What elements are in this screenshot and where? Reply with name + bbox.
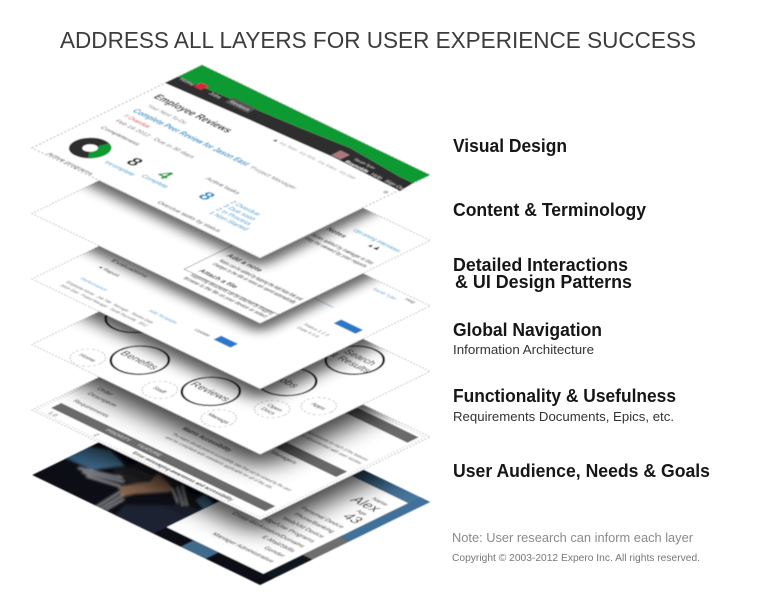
next to-do: Your Next To-Do — [145, 104, 189, 125]
next to-do — [111, 103, 311, 199]
site map labels: Apps — [309, 402, 327, 411]
shadow from layer 2 — [80, 246, 381, 338]
panel outline — [32, 327, 430, 520]
form details: ● Report — [96, 266, 121, 278]
notes copy: Supporting documents can be attached by dragging — [188, 273, 276, 316]
persona card — [167, 456, 408, 574]
site map labels: Manage — [205, 412, 232, 425]
notes copy: browse to the file on your device or select — [181, 276, 269, 319]
labels — [453, 136, 710, 481]
persona photo — [32, 442, 412, 585]
completeness donut — [45, 126, 149, 176]
page heading: Employee Reviews — [150, 93, 235, 134]
persona text — [199, 470, 394, 565]
site map labels: & Results — [325, 351, 374, 374]
label: user audience: User Audience, Needs & Goals — [453, 461, 710, 481]
requirements text: Requirements for each of the features — [302, 429, 370, 462]
form details — [58, 207, 417, 381]
form details: Sarah Tyler — [370, 287, 399, 301]
navigation site map — [38, 266, 417, 450]
label: global navigation — [453, 320, 602, 357]
dark navigation band — [165, 77, 413, 191]
persona text: Cross-Workstation/Domains — [229, 511, 307, 549]
layer 2: content and terminology — [31, 180, 430, 324]
site map labels: Staff — [150, 386, 168, 395]
filter row — [270, 137, 391, 195]
filter row: Any Team · Any Role · Any Status · Any Date — [277, 141, 358, 180]
notes copy: may be viewed by your reports — [302, 236, 369, 269]
active tasks: Active tasks — [203, 177, 242, 195]
next to-do: !! Overdue — [121, 114, 152, 129]
panel outline — [32, 196, 430, 389]
navigation items: Sign Out — [382, 179, 407, 191]
active tasks: Overdue tasks by status — [155, 200, 223, 233]
requirements text: PRIORITY — [103, 429, 132, 443]
label: functionality and usefulness — [453, 386, 676, 424]
site map labels: Jobs — [271, 375, 302, 389]
requirements text: 2 — [91, 433, 101, 438]
requirements text: 1.0 — [46, 411, 60, 418]
active tasks: 2 In Process — [214, 207, 254, 227]
next to-do: Complete Peer Review for Jason East — [130, 108, 253, 167]
shadow from layer 4 — [62, 376, 400, 481]
form details: Employee Name · Job Title · Manager · Review Date — [64, 281, 155, 325]
label: content and terminology: Content & Terminology — [453, 200, 646, 220]
navigation items: Reviews — [227, 100, 251, 112]
site map labels: Open — [265, 403, 284, 413]
form details: Evaluations — [109, 259, 150, 278]
navigation items: Home — [177, 78, 196, 87]
active tasks — [155, 177, 284, 239]
title: ADDRESS ALL LAYERS FOR USER EXPERIENCE SUCCESS — [60, 27, 696, 53]
label: global navigation: Information Architecture — [453, 343, 594, 357]
requirements text: The matrix should present accessibility data that can be viewed by the user — [169, 433, 293, 492]
requirements text: are documented with user stories — [296, 433, 363, 465]
persona text: Knowledge/Use Programs — [244, 509, 317, 544]
notes copy: Attach a file — [196, 268, 241, 289]
site map labels: Benefits — [117, 350, 162, 371]
next to-do: Feb 16 2012 · Due in 30 days — [113, 119, 197, 159]
blue photo border strips — [154, 451, 430, 585]
form details: Status 1 2 3 — [301, 323, 331, 337]
active tasks: 3 Due soon — [221, 204, 258, 222]
persona text: Gender — [261, 546, 288, 559]
notes copy: Notes — [324, 226, 350, 239]
notes copy — [180, 210, 403, 319]
navigation items: Sarah Tyler — [352, 158, 378, 170]
layer 1: visual design screen — [32, 65, 430, 260]
persona text: Age — [354, 510, 368, 516]
notes copy: changes to the title or notes are saved automatically — [210, 262, 299, 305]
form details: Date 4 5 6 — [295, 326, 321, 339]
filter row: ⚙ — [380, 190, 391, 195]
program stats — [102, 149, 188, 191]
panel outline — [32, 262, 430, 454]
label: detailed interactions — [453, 255, 632, 292]
form details: Update — [192, 328, 212, 338]
persona text: Phone/Banking — [291, 512, 337, 534]
requirements text: Managers — [268, 450, 299, 465]
requirements text: Matrix Accessibility — [180, 426, 235, 453]
label: visual design: Visual Design — [453, 136, 567, 156]
panel outline — [32, 130, 430, 323]
layer 5: functionality and usefulness — [31, 376, 430, 520]
active tasks: 8 — [193, 189, 220, 203]
persona text: Personal Device — [298, 506, 346, 529]
requirements text — [46, 358, 370, 515]
site map labels: Reviews — [187, 381, 233, 403]
persona text: Name — [369, 497, 391, 507]
navigation items — [174, 76, 415, 191]
form details: Help — [402, 298, 417, 305]
shadow from layer 1 — [80, 180, 381, 272]
form details: Performance — [78, 277, 109, 292]
persona text: 43 — [338, 512, 366, 526]
label: global navigation: Global Navigation — [453, 320, 602, 340]
site map labels: Docs — [259, 407, 277, 416]
notes copy: Notes added by manager to this — [309, 233, 376, 265]
completeness donut: Completeness — [98, 126, 142, 147]
completeness donut: Active programs — [45, 152, 95, 176]
site map labels: Home — [77, 353, 98, 363]
requirements text: FEATURE — [135, 444, 163, 458]
green header band — [178, 65, 430, 183]
buttons — [214, 294, 372, 371]
requirement bars — [51, 334, 419, 512]
label: detailed interactions: & UI Design Patterns — [455, 272, 632, 292]
label: functionality and usefulness: Requirements Documents, Epics, etc. — [453, 410, 674, 424]
site map labels — [77, 286, 400, 443]
copyright: Copyright © 2003-2012 Expero Inc. All rights reserved. — [452, 552, 700, 564]
persona text: Web/Vid Device — [280, 516, 327, 539]
notes copy: Upcoming interviews — [350, 228, 403, 253]
shadow from layer 5 — [54, 442, 396, 546]
label: detailed interactions: Detailed Interactions — [453, 255, 628, 275]
active tasks: 2 Overdue — [228, 200, 262, 217]
program stats: 8 — [121, 155, 148, 168]
requirements text: Order — [95, 387, 115, 397]
requirements text: and be compliant with standards applicable for all of the site. — [163, 436, 275, 490]
notes box border — [184, 205, 410, 315]
requirements text: Error messaging-awareness and accessibility — [130, 451, 236, 502]
persona text: Alex — [346, 495, 385, 514]
active tasks: 1 Non-Started — [207, 211, 250, 232]
filter row: ▲ — [270, 138, 282, 143]
program stats: Complete — [139, 174, 170, 189]
label: functionality and usefulness: Functionality & Usefulness — [453, 386, 676, 406]
layer 6: user audience persona — [32, 442, 430, 586]
next to-do: Project Manager — [248, 166, 299, 190]
site map labels: Search — [340, 349, 379, 367]
layer 4: global navigation — [31, 311, 430, 455]
inner outline — [37, 329, 425, 518]
requirements text: Description — [85, 392, 119, 408]
navigation items: Reynolds — [342, 160, 370, 174]
note: Note: User research can inform each layer — [452, 530, 694, 545]
navigation items: Jobs — [207, 92, 223, 100]
layer 3: detailed interactions — [31, 246, 430, 390]
screen panel — [32, 65, 430, 258]
form details: Add Template — [146, 309, 179, 325]
persona text: Manager Administrative — [210, 532, 276, 564]
navigation items: Help — [368, 173, 384, 180]
layer stack — [31, 64, 430, 586]
program stats: 4 — [152, 168, 179, 182]
notes copy: Notes can be added by tapping the Add Note link and — [217, 259, 305, 302]
notes copy: Add a note — [224, 253, 266, 273]
form details: Jason East · Project Manager · Sarah Reynolds · 2012 — [58, 284, 149, 328]
shadow from layer 3 — [74, 311, 388, 408]
requirements text: Requirements — [71, 399, 111, 418]
persona text: E-Mail/Skills — [260, 535, 297, 553]
notes copy: ▲♟ — [365, 242, 383, 251]
program stats: Incomplete — [102, 160, 137, 177]
